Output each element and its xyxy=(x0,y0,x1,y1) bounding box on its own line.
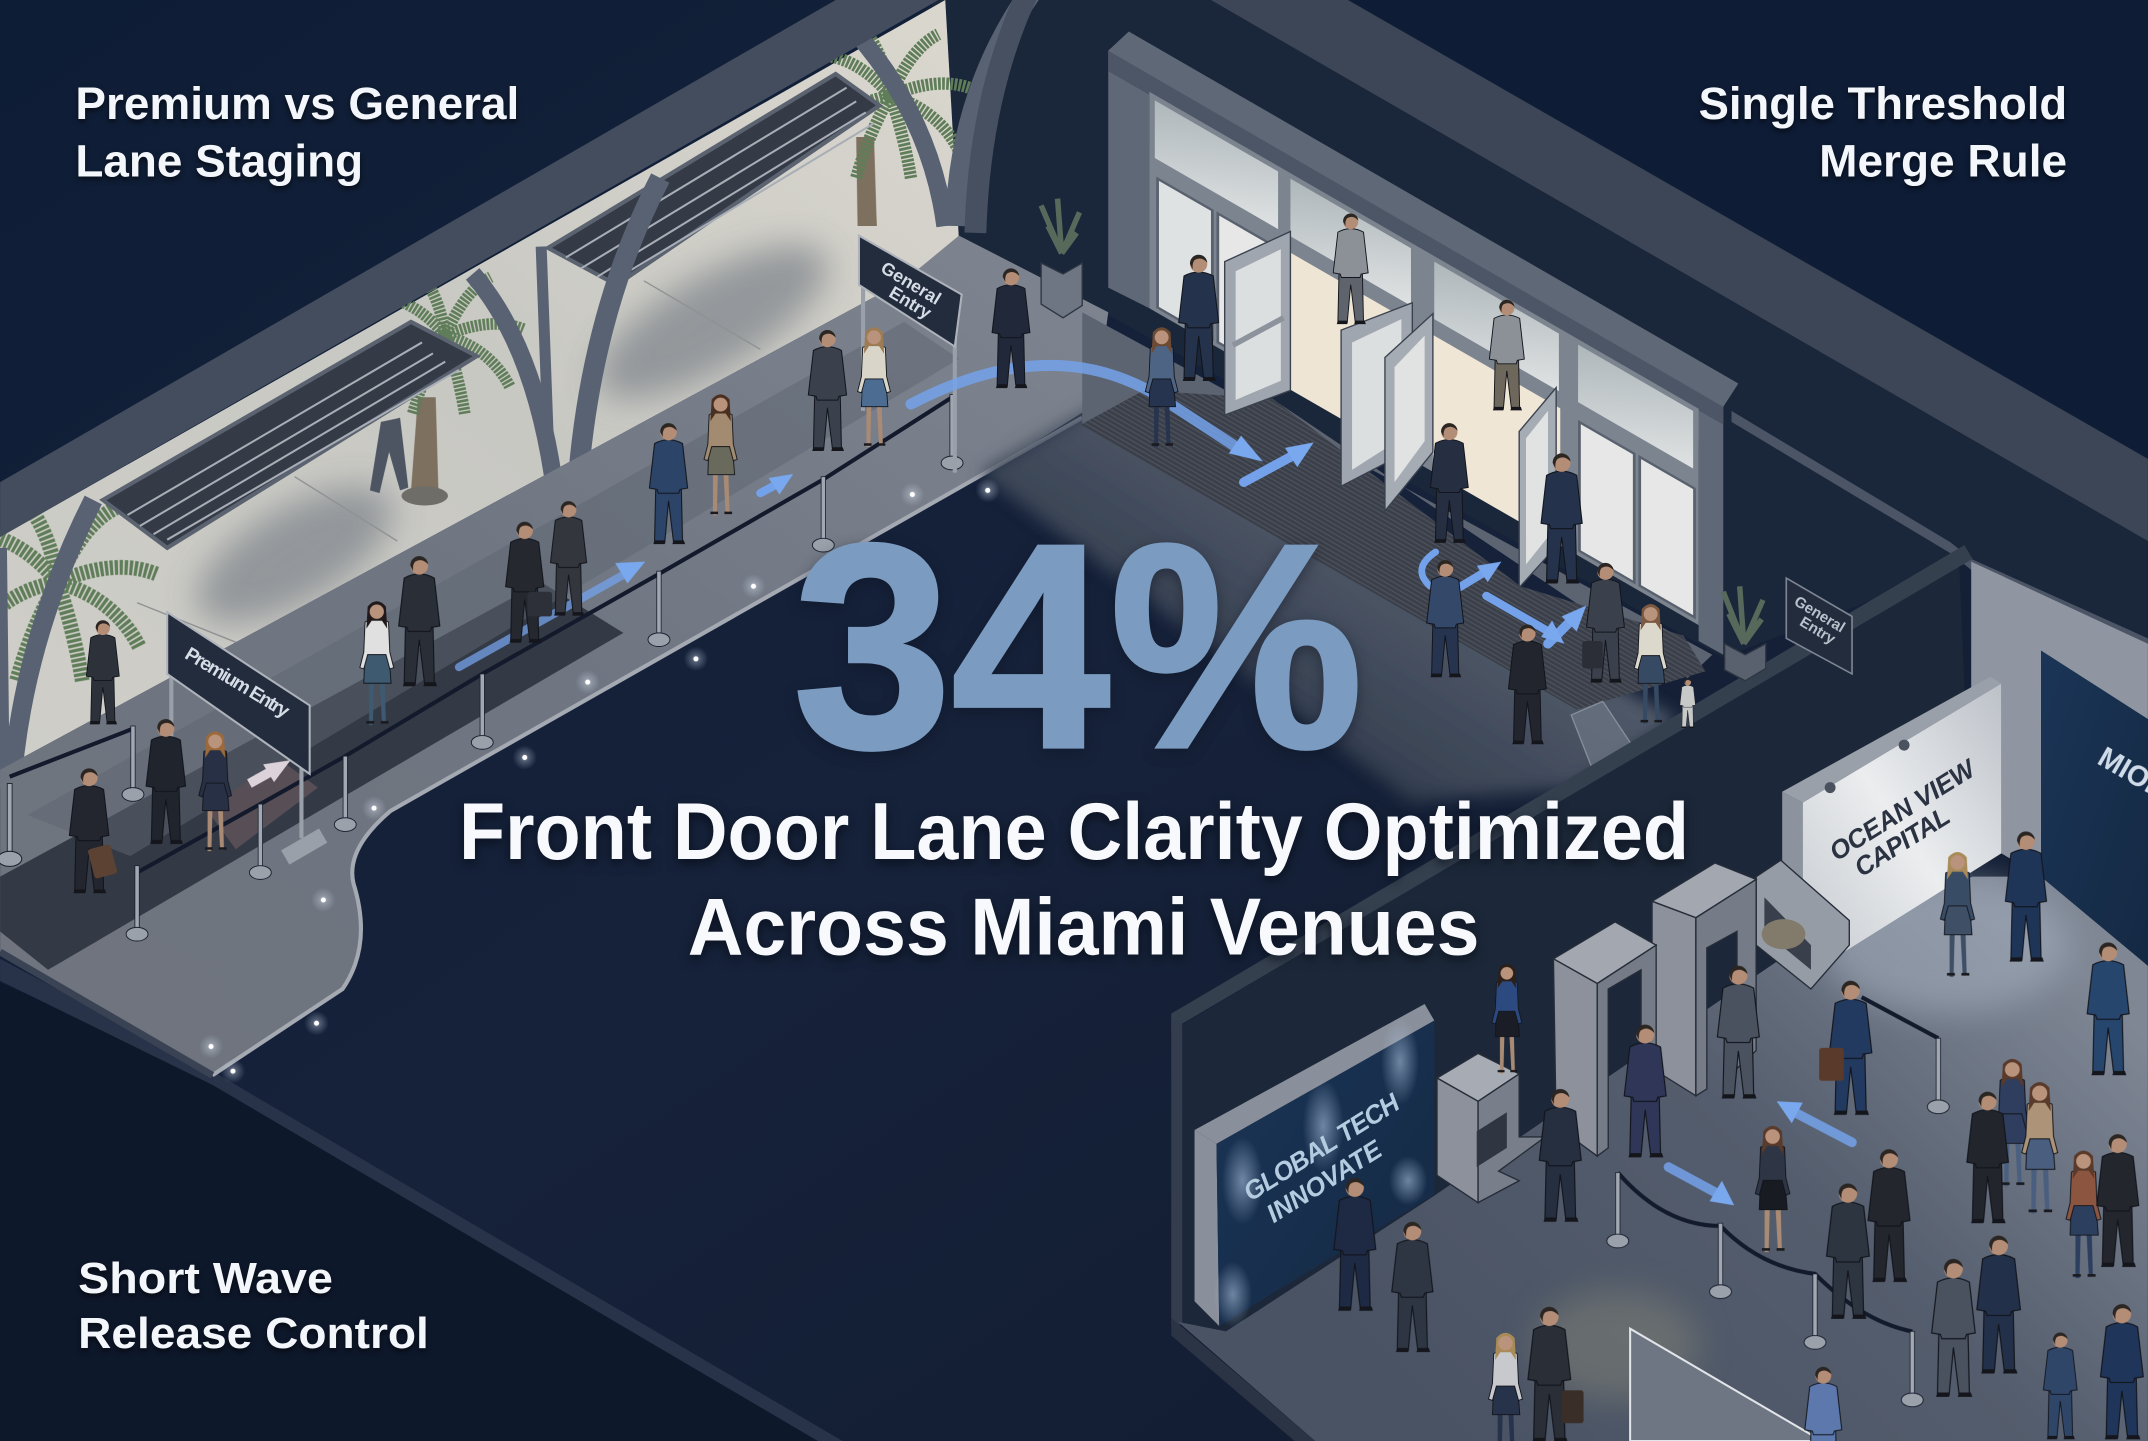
label: Short Wave: Short Wave xyxy=(78,1254,333,1303)
panel: door frame and glazing xyxy=(1108,32,1738,655)
icon: plant right xyxy=(1723,586,1766,681)
platform left edge xyxy=(0,952,212,1075)
open door leaf 4 xyxy=(1519,388,1556,588)
label: Single Threshold: Merge Rule xyxy=(1819,136,2067,187)
Global Tech banner: INNOVATE xyxy=(1261,1134,1388,1229)
MION banner xyxy=(2041,651,2148,966)
hall floor light near Ocean View xyxy=(1822,877,2068,1014)
label: Single Threshold xyxy=(1699,78,2067,187)
hall lower edge xyxy=(1171,1318,1315,1441)
partition panel xyxy=(1630,1329,1822,1441)
open door leaf 2 xyxy=(1341,303,1412,486)
panel: outdoor sidewalk xyxy=(0,0,1030,794)
right wall band xyxy=(1731,411,2148,649)
General Entry sign: General xyxy=(877,258,945,309)
palm shadow patches xyxy=(176,216,848,650)
General Entry sign hall: Entry xyxy=(1797,613,1839,648)
floor light patches xyxy=(1534,1290,1699,1400)
x-ray scanner front xyxy=(1437,1053,1545,1203)
Global Tech banner: GLOBAL TECH xyxy=(1238,1087,1406,1207)
general lane mat tint xyxy=(27,322,959,856)
platform edge xyxy=(212,418,1082,1075)
pergola slats left xyxy=(103,322,477,548)
General Entry sign: Entry xyxy=(886,282,935,323)
roof band xyxy=(0,0,938,537)
pink arrow xyxy=(249,760,290,784)
right roof band xyxy=(1211,0,2148,541)
stanchions premium lane xyxy=(0,394,963,941)
title line 2: Across Miami Venues xyxy=(688,883,1479,973)
panel: premium walkway floor xyxy=(0,236,1108,1075)
Ocean View Capital board: CAPITAL xyxy=(1849,801,1955,883)
hall floor xyxy=(1178,877,2148,1441)
arch column centre xyxy=(473,178,660,527)
right arch behind wall xyxy=(975,0,1027,233)
arch column left xyxy=(0,500,93,794)
entrance carpet xyxy=(1081,390,1705,710)
Ocean View Capital board: OCEAN VIEW xyxy=(1824,752,1982,867)
Ocean View Capital board xyxy=(1782,677,2001,977)
stanchions hall xyxy=(1607,997,1949,1407)
right white wall xyxy=(1971,562,2148,877)
diagonal floor edge band xyxy=(0,959,843,1441)
pink arrow patch xyxy=(206,760,318,849)
glass wall skewed xyxy=(1149,92,1699,625)
premium lane dark mat xyxy=(0,582,623,970)
building wall xyxy=(932,0,2148,767)
icon: palm trees xyxy=(0,21,973,681)
top right sky xyxy=(1348,0,2148,459)
turnstile barrier xyxy=(1571,701,1633,778)
label: Single Threshold: Single Threshold xyxy=(1699,78,2067,129)
open door leaf 1 xyxy=(1225,231,1290,415)
arrow heads xyxy=(615,436,1803,1205)
metal detector back xyxy=(1652,863,1756,1096)
General Entry sign hall: General xyxy=(1791,593,1848,636)
Premium Entry sign xyxy=(167,612,327,865)
icon: plant left xyxy=(1041,199,1082,318)
lower left dark corner xyxy=(0,982,829,1441)
label: Premium vs General: Premium vs General xyxy=(75,78,519,129)
label: Premium vs General xyxy=(75,78,519,187)
hall left post xyxy=(1171,1020,1182,1325)
people: premium lane xyxy=(69,268,1030,893)
open door leaf 3 xyxy=(1385,314,1433,511)
General Entry sign hall xyxy=(1786,578,1852,674)
pergola slats right xyxy=(548,74,879,285)
stanchion ropes premium lane xyxy=(10,397,952,873)
General Entry sign xyxy=(859,236,962,473)
people: hall xyxy=(1334,831,2143,1441)
blue flow arrows xyxy=(459,365,1852,1194)
Global Tech banner xyxy=(1195,1004,1434,1327)
pavement joint lines xyxy=(137,281,760,644)
label: Short Wave: Release Control xyxy=(78,1309,429,1358)
x-ray scanner back xyxy=(1756,860,1849,989)
upper floor near doors xyxy=(1082,312,1712,678)
label: Short Wave xyxy=(78,1254,429,1358)
metal detector front xyxy=(1553,922,1656,1156)
big stat 34%: 34% xyxy=(793,484,1363,809)
hall back wall xyxy=(1178,559,1973,1331)
arch column right xyxy=(863,0,1030,226)
panel: exhibition hall xyxy=(1171,545,2148,1441)
label: Premium vs General: Lane Staging xyxy=(75,136,363,187)
Premium Entry sign: Premium Entry xyxy=(181,644,293,723)
door forecourt floor xyxy=(979,404,1678,801)
hall top band xyxy=(1171,545,1973,1030)
people: doors and guards xyxy=(1145,213,1695,744)
title line 1: Front Door Lane Clarity Optimized xyxy=(459,787,1689,877)
floor lights xyxy=(199,478,1000,1083)
